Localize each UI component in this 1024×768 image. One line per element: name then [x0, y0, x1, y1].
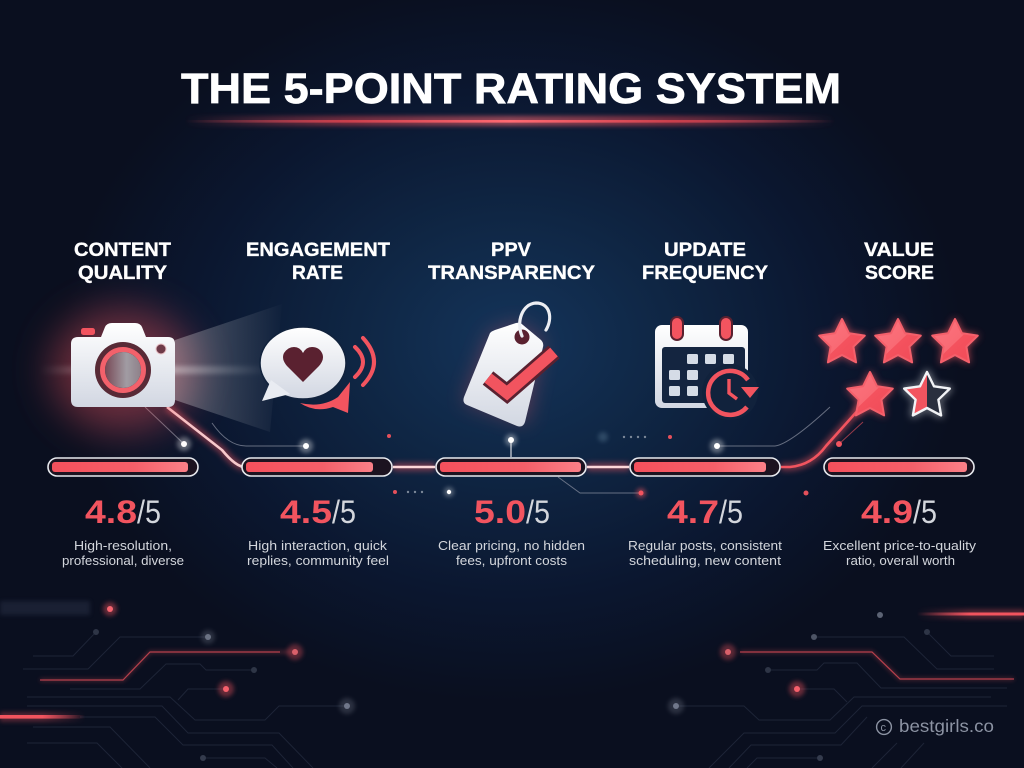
watermark: c	[880, 722, 886, 734]
heading: value score	[864, 240, 934, 284]
icon: price tag with check	[463, 303, 554, 426]
column 5: value score	[819, 240, 978, 568]
column 4: update frequency	[628, 240, 782, 568]
heading: update frequency	[642, 240, 768, 284]
score 4.7	[667, 494, 743, 530]
description 2: replies, community feel	[247, 553, 389, 568]
column 2: engagement rate	[242, 240, 392, 568]
circuit decoration: bottom right	[668, 609, 1024, 768]
icon: calendar with clock	[655, 317, 759, 420]
heading: PPV transparency	[428, 240, 595, 284]
watermark: bestgirls.co	[899, 716, 994, 736]
score 4.8: /5	[137, 494, 161, 530]
thin connector lines and nodes	[145, 407, 863, 498]
progress bar 3	[436, 458, 586, 476]
score 5.0	[474, 494, 550, 530]
score 4.9	[861, 494, 937, 530]
description 5	[823, 538, 977, 568]
description 3: Clear pricing, no hidden	[438, 538, 585, 553]
description 2: High interaction, quick	[248, 538, 388, 553]
score 5.0: /5	[526, 494, 550, 530]
heading: value score: SCORE	[865, 263, 934, 284]
description 5: ratio, overall worth	[846, 553, 955, 568]
title underline	[185, 116, 835, 126]
heading: update frequency: FREQUENCY	[642, 263, 768, 284]
heading: PPV transparency: PPV	[491, 240, 531, 261]
title: THE 5-POINT RATING SYSTEM	[181, 65, 841, 113]
score 4.5: /5	[332, 494, 356, 530]
heading: content quality: CONTENT	[74, 240, 171, 261]
column 1: content quality	[40, 240, 282, 568]
circuit decoration: bottom left	[0, 601, 355, 768]
heading: content quality	[74, 240, 171, 284]
description 1: High-resolution,	[74, 538, 172, 553]
score 4.7: /5	[719, 494, 743, 530]
description 4: scheduling, new content	[629, 553, 781, 568]
score 4.5: 4.5	[280, 494, 332, 530]
score 4.9: /5	[913, 494, 937, 530]
heading: value score: VALUE	[864, 240, 934, 261]
progress bar 5	[824, 458, 974, 476]
score 4.8	[85, 494, 161, 530]
heading: update frequency: UPDATE	[664, 240, 746, 261]
heading: engagement rate	[246, 240, 390, 284]
progress bar 1	[48, 458, 198, 476]
description 3: fees, upfront costs	[456, 553, 568, 568]
heading: engagement rate: RATE	[292, 263, 343, 284]
progress bar 2	[242, 458, 392, 476]
column 3: PPV transparency	[428, 240, 595, 568]
description 3	[438, 538, 585, 568]
description 4	[628, 538, 782, 568]
score 4.9: 4.9	[861, 494, 913, 530]
icon: speech bubble with heart	[260, 327, 374, 413]
score 4.8: 4.8	[85, 494, 137, 530]
description 4: Regular posts, consistent	[628, 538, 782, 553]
score 5.0: 5.0	[474, 494, 526, 530]
score 4.7: 4.7	[667, 494, 719, 530]
icon: camera with light beam	[40, 304, 282, 432]
description 2	[247, 538, 389, 568]
connector rail	[167, 407, 860, 467]
description 5: Excellent price-to-quality	[823, 538, 977, 553]
progress bar 4	[630, 458, 780, 476]
heading: PPV transparency: TRANSPARENCY	[428, 263, 595, 284]
icon: rating stars	[819, 319, 978, 415]
heading: content quality: QUALITY	[78, 263, 167, 284]
description 1: professional, diverse	[62, 553, 184, 568]
description 1	[62, 538, 184, 568]
heading: engagement rate: ENGAGEMENT	[246, 240, 390, 261]
score 4.5	[280, 494, 356, 530]
